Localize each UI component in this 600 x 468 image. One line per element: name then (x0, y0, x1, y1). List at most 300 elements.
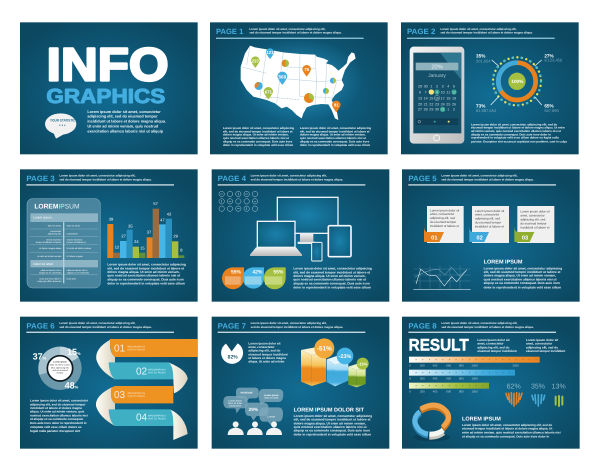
card 01: Lorem ipsum dolor sit (430, 209, 459, 212)
ribbon label 01: SITE TO TRUOY (127, 349, 145, 351)
stat: 27%: 9,123,456 (544, 58, 562, 63)
text block: Lorem ipsum dolor sit amet, consectetur (30, 399, 88, 402)
3D ring chart (413, 405, 450, 441)
text column right: elit, sed do eiusmod tempor incididunt ut labore et (300, 130, 370, 133)
text block: eiusmod tempor incididunt ut labore et dolore magna aliqua. Ut enim (471, 126, 565, 129)
text block: elit, sed do eiusmod tempor incididunt ut labore et (293, 271, 370, 274)
heading: page 5: PAGE 5 (408, 174, 437, 183)
card 03: adipiscing elit, sed (520, 218, 545, 221)
panel: page 8 result (402, 317, 580, 449)
text block: incididunt ut labore et dolore magna (30, 406, 82, 410)
intro text: sed do eiusmod tempor incididunt ut labore et dolore magna aliqua. (59, 178, 152, 181)
intro text: sed do eiusmod tempor incididunt ut labore et dolore magna aliqua. (59, 325, 152, 329)
speech bubbles (223, 388, 283, 425)
text column two: Lorem ipsum dolor sit (526, 338, 558, 342)
stat: 27%: 27% (544, 53, 554, 58)
laptop (250, 221, 302, 256)
phone with calendar: 15 (429, 96, 433, 100)
phone with calendar: 25 (446, 102, 450, 106)
bubble labels: Lorem ipsum (228, 399, 242, 402)
text block: aliquip ex ea commodo consequat. Duis aute irure (294, 429, 370, 433)
table panel: culpa qui officia deserunt (37, 280, 61, 283)
phone with calendar: January (428, 73, 446, 78)
pin: 671 (264, 87, 273, 99)
table panel: ut enim ad minim veniam (37, 255, 61, 258)
phone with calendar: 9 (436, 90, 438, 94)
text column one: adipiscing elit, sed do (477, 346, 509, 349)
badge: -23% (337, 348, 353, 364)
card 02: incididunt ut labore et (475, 225, 504, 228)
text block: elit, sed do eiusmod tempor incididunt ut labore et (294, 418, 371, 422)
phone with calendar: 19 (452, 96, 456, 100)
3D box: orange (301, 347, 326, 386)
phone with calendar: 17 (441, 96, 445, 100)
text column one: eiusmod tempor incididunt (477, 349, 517, 353)
text column right: quis nostrud exercitation ullamco laboris nisi ut (300, 136, 366, 140)
text block: eiusmod tempor incididunt (248, 353, 288, 356)
phone with calendar (410, 47, 464, 144)
bar chart: 29 (173, 234, 178, 238)
intro text: sed do eiusmod tempor incididunt ut labore et dolore magna aliqua. (251, 325, 343, 329)
phone with calendar: 30 (424, 85, 428, 89)
card 03: incididunt ut labore et (520, 226, 550, 229)
bubble labels: Lorem (268, 415, 275, 418)
phone with calendar: 29 (418, 85, 422, 89)
intro text: sed do eiusmod tempor incididunt ut labore et dolore magna aliqua. (249, 31, 342, 34)
heading: page 6: PAGE 6 (26, 321, 55, 330)
donut chart: 100% (511, 79, 523, 84)
phone with calendar: 7 (425, 90, 427, 94)
ribbon label 04: 04 (136, 412, 147, 423)
stat: 27% (544, 53, 562, 63)
stat: 13%: 13% (552, 382, 566, 390)
table panel: aliquip ex ea commodo (39, 272, 61, 274)
phone with calendar: 13 (418, 96, 422, 100)
stat: 35%: 35% (531, 382, 545, 390)
text block: Lorem ipsum dolor sit amet, consectetur adipiscing (293, 267, 372, 271)
stat: 65%: 65% (544, 103, 554, 108)
table panel: Lorem ipsum (33, 216, 52, 220)
text block: reprehenderit in voluptate velit esse cillum dolore eu fugiat nulla (471, 136, 559, 139)
badge: -23%: -23% (339, 354, 351, 359)
phone with calendar: 6 (419, 90, 421, 94)
table panel: ullamco laboris nisi ut (67, 269, 87, 272)
ring chart: dolor sit amet, consec (50, 364, 71, 366)
intro text: Lorem ipsum dolor sit amet, consectetur adipiscing elit, (59, 321, 135, 325)
intro text: sed do eiusmod tempor incididunt ut labore et dolore magna aliqua. (440, 31, 533, 34)
ribbon label 03: 03 (114, 389, 125, 400)
cover text block: exercitation ullamco laboris nisi ut aliquip (87, 129, 163, 133)
drop: orange 55% (222, 267, 244, 289)
pie: 82% (221, 343, 243, 364)
heading: lorem ipsum: LOREM IPSUM (462, 416, 501, 422)
bubble labels: dolor sit amet (228, 402, 242, 405)
stat: 15%: 15% (67, 347, 81, 357)
text block: adipiscing elit, sed do eiusmod tempor (30, 403, 86, 406)
phone with calendar: 29 (429, 108, 433, 112)
panel: page 6 ribbons (20, 317, 198, 449)
orange progress bar: 600 (446, 364, 451, 367)
table panel: adipiscing elit, (48, 233, 61, 235)
text column left: aliquip ex ea commodo consequat. Duis aute irure (223, 140, 292, 143)
text block: adipiscing elit, sed do (248, 349, 280, 352)
text block: dolore magna aliqua. Ut enim ad minim veniam, (107, 270, 180, 274)
badge: -51% (314, 338, 334, 358)
ring chart: tetur adipiscing elit, (51, 367, 69, 369)
intro text: sed do eiusmod tempor incididunt ut labore et dolore magna aliqua. (441, 178, 534, 181)
heading: page 3: PAGE 3 (26, 174, 55, 183)
table panel: dolor sit amet, (48, 225, 61, 227)
bubble labels: Lorem ipsum (264, 394, 279, 397)
green progress bar: 0 (409, 390, 411, 393)
text block: ut aliquip ex ea commodo consequat. (30, 417, 84, 421)
orange progress bar: 0 (409, 364, 411, 367)
ring chart: tempor (57, 372, 64, 374)
card 02: do eiusmod tempor (475, 221, 501, 224)
text block: voluptate velit esse cillum dolore eu (30, 425, 82, 429)
pin: 671: 671 (265, 89, 272, 94)
card 01: adipiscing elit, sed (430, 216, 455, 220)
phone with calendar: 3 (442, 85, 444, 89)
green progress bar: 400 (433, 390, 437, 393)
donut chart (491, 57, 542, 105)
text column right: aliquip ex ea commodo consequat. Duis aute irure (300, 140, 369, 143)
text block: Lorem ipsum dolor sit amet, consectetur adipiscing (107, 263, 186, 267)
text block: aliqua. Ut enim ad minim veniam, quis (30, 410, 84, 413)
table panel: dolor sit amet, (67, 225, 80, 227)
heading: result: RESULT (409, 335, 469, 354)
text block: quis nostrud exercitation ullamco laboris nisi ut (294, 425, 367, 429)
heading: page 4: PAGE 4 (218, 174, 246, 183)
intro text: Lorem ipsum dolor sit amet, consectetur adipiscing elit, (441, 174, 517, 177)
ribbon label 01: INFOGRAPHICS (127, 346, 145, 348)
phone with calendar: 27 (418, 108, 422, 112)
text block: ut aliquip ex ea commodo consequat. Duis aute irure dolor in (462, 435, 549, 438)
table panel: ullamco laboris nisi ut (41, 269, 61, 272)
panel: page 2 phone and donut (401, 22, 579, 154)
ribbon label 02: SITE TO TRUOY (148, 372, 166, 374)
speech bubble: your statistic: • • • (59, 123, 66, 128)
stat: 37%: 37% (33, 352, 46, 362)
bar chart: 27 (121, 234, 126, 238)
cover text block: Lorem ipsum dolor sit amet, consectetur (87, 110, 161, 114)
card 02: Lorem ipsum dolor sit (475, 209, 504, 213)
phone with calendar: 2 (436, 85, 438, 89)
phone (312, 242, 322, 261)
speech bubble: your statistic (45, 113, 76, 139)
panel: page 1 map (210, 22, 388, 154)
blue progress bar: 200 (420, 377, 425, 380)
bar chart: 57 (153, 201, 158, 206)
badge: -15% (357, 358, 369, 370)
pin: 121: 121 (266, 50, 274, 55)
text column right: dolore magna aliqua. Ut enim ad minim veniam, (300, 133, 365, 136)
stat: 35%: 35% (476, 53, 486, 58)
text block: ut labore et dolore magna (248, 356, 286, 360)
text block: elit, sed do eiusmod tempor incididunt ut labore et (107, 267, 184, 270)
stat: 73% (476, 103, 496, 113)
cover text block: incididunt ut labore et dolore magna aliqua. (87, 120, 166, 124)
text column two: adipiscing elit, sed do (526, 346, 558, 349)
phone with calendar: 22 (429, 102, 433, 106)
table panel: sed do eiusmod (67, 239, 82, 241)
card 02: amet, consectetur (475, 213, 499, 216)
bubble labels: consectetur (229, 405, 241, 407)
phone with calendar: 20 (418, 102, 422, 106)
pin: 91: 91 (334, 103, 339, 108)
phone with calendar: 4 (447, 85, 449, 89)
phone with calendar: 14 (424, 96, 428, 100)
bar chart: 37 (147, 230, 151, 234)
cover text block: adipiscing elit, sed do eiusmod tempor (87, 115, 158, 119)
text block: dolor in reprehenderit in voluptate velit esse cillum (293, 286, 371, 289)
intro text: Lorem ipsum dolor sit amet, consectetur adipiscing elit, (59, 174, 135, 177)
stat: 73%: 73% (476, 103, 486, 108)
text block: aliquip ex ea commodo consequat. Duis aute irure (107, 278, 184, 281)
title: GRAPHICS: GRAPHICS (46, 85, 165, 107)
text block: dolor in reprehenderit in voluptate velit esse cillum (484, 286, 561, 289)
orange progress bar: 200 (420, 364, 425, 367)
stat: 35% (476, 53, 491, 63)
heading: lorem ipsum: LOREM IPSUM (484, 259, 522, 265)
text column left: elit, sed do eiusmod tempor incididunt ut labore et (223, 130, 293, 133)
text block: dolor in reprehenderit in voluptate velit esse cillum (107, 282, 185, 285)
phone with calendar: 1 (447, 108, 449, 112)
text block: aliquip ex ea commodo consequat. Duis aute irure dolor in (471, 133, 551, 136)
intro text: Lorem ipsum dolor sit amet, consectetur adipiscing elit, (251, 174, 327, 177)
text block: Lorem ipsum dolor sit amet, consectetur adipiscing elit, sed do (471, 123, 557, 126)
stat: 73%: 81,987,654 (476, 108, 496, 113)
phone with calendar: 23 (435, 102, 439, 106)
tablet (328, 226, 351, 257)
heading: page 1: PAGE 1 (216, 27, 243, 36)
text block: ad minim veniam, quis nostrud exercitation ullamco laboris nisi ut (471, 129, 561, 133)
green progress bar: 1000 (471, 390, 478, 393)
card 01: amet, consectetur (430, 212, 454, 216)
bar chart: 12 (115, 245, 119, 250)
stat: 35% (531, 382, 545, 406)
line chart (413, 265, 471, 289)
card 03: do eiusmod tempor (520, 222, 547, 225)
ribbon label 02 (136, 366, 166, 377)
intro text: Lorem ipsum dolor sit amet, consectetur adipiscing elit, (440, 27, 516, 31)
text block: amet, consectetur (248, 345, 275, 349)
stat: 62%: 62% (507, 382, 521, 390)
table panel: Duis aute irure dolor in (40, 278, 61, 280)
card 01: 01 (431, 235, 437, 241)
stat: 35%: 201,654 (476, 59, 491, 63)
text block: aliquip ex ea commodo consequat. Duis aute irure (293, 282, 370, 285)
card 02: 02 (477, 235, 483, 241)
ribbon label 03: SITE TO TRUOY (127, 395, 145, 398)
heading: lorem ipsum dolor sit: LOREM IPSUM DOLOR SIT (294, 407, 364, 413)
text block: eiusmod tempor incididunt ut labore et dolore magna aliqua. Ut (462, 427, 552, 430)
text block: Duis aute irure dolor in reprehenderit in (30, 421, 87, 425)
text column two: amet, consectetur (526, 342, 552, 345)
3D box: blue (327, 356, 348, 386)
green progress bar: 200 (420, 390, 425, 393)
badge: -15%: -15% (358, 362, 367, 366)
phone with calendar: 28 (424, 108, 428, 112)
table panel: et dolore magna aliqua (39, 247, 61, 250)
text column left: dolor in reprehenderit in voluptate velit esse cillum (223, 143, 293, 147)
ribbon label 04: SITE TO TRUOY (148, 418, 166, 420)
blue progress bar: 0 (409, 377, 411, 380)
heading: page 8: PAGE 8 (408, 321, 437, 330)
text block: Lorem ipsum dolor sit amet, consectetur adipiscing (484, 267, 562, 270)
table panel: consectetur (50, 230, 62, 233)
phone with calendar: 5 (453, 85, 455, 89)
bubble labels: INCREASE (241, 392, 253, 394)
phone with calendar: 30 (435, 108, 439, 112)
text column right: dolor in reprehenderit in voluptate velit esse cillum (300, 143, 370, 147)
bubble labels: dolor sit amet (264, 397, 278, 399)
table panel: LOREMIPSUM (34, 203, 80, 210)
bar chart: 43 (167, 212, 171, 216)
ring chart: sed do eiusmod (52, 369, 68, 372)
text block: aliquip ex ea commodo consequat. Duis aute irure (484, 281, 560, 285)
ribbon label 02: INFOGRAPHICS (148, 369, 166, 371)
bar chart: 8 (180, 248, 183, 252)
orange progress bar: 800 (459, 364, 464, 367)
map: USA (241, 46, 356, 120)
stat: 48%: 48% (65, 381, 78, 391)
bar chart: 47 (160, 218, 165, 222)
panel: cover (20, 22, 198, 154)
table panel: tempor incididunt ut (67, 241, 86, 244)
title: INFO: INFO (47, 38, 169, 91)
text column one: amet, consectetur (477, 342, 504, 345)
blue progress bar (409, 370, 515, 380)
blue progress bar: 800 (459, 377, 464, 380)
text column left: Lorem ipsum dolor sit amet, consectetur adipiscing (223, 126, 294, 130)
orange progress bar: 1000 (471, 364, 478, 367)
panel: page 4 devices (212, 169, 389, 302)
card 03: amet, consectetur (520, 214, 545, 217)
table panel: Dolor sit amet (33, 262, 53, 266)
text block: aliqua. Ut enim ad minim (248, 360, 284, 363)
drop: green 55%: 55% (273, 269, 283, 275)
bubble labels (228, 392, 279, 418)
ribbon label 02: 02 (136, 366, 147, 377)
intro text: sed do eiusmod tempor incididunt ut labore et dolore magna aliqua. (251, 178, 343, 181)
people icons (228, 421, 282, 435)
speech bubble: your statistic: YOUR STATISTIC (50, 118, 75, 122)
card 03: 03 (522, 235, 528, 241)
table panel (27, 199, 100, 288)
panel: page 7 boxes and bubbles (212, 317, 389, 449)
drop: orange 55%: 55% (231, 269, 241, 275)
stat: 13% (552, 382, 566, 406)
phone with calendar: 18 (446, 96, 450, 100)
text block: dolor in reprehenderit in voluptate velit esse cillum (294, 433, 371, 437)
cover text block: Ut enim ad minim veniam, quis nostrud (87, 124, 158, 128)
text column right: Lorem ipsum dolor sit amet, consectetur adipiscing (300, 126, 371, 130)
bar chart: 39 (109, 217, 113, 222)
pin: 91 (332, 101, 341, 112)
card 01: do eiusmod tempor (430, 220, 456, 224)
blue progress bar: 600 (446, 377, 451, 380)
stat: 65%: 567,890 (544, 108, 559, 113)
card 03 (514, 206, 554, 243)
table panel: Duis aute (67, 278, 76, 280)
intro text: Lorem ipsum dolor sit amet, consectetur adipiscing elit, (249, 27, 325, 31)
text column one: Lorem ipsum dolor sit (477, 338, 509, 342)
pin: 237: 237 (252, 58, 259, 63)
bar chart: 24 (134, 239, 139, 244)
pin: 568 (277, 72, 287, 85)
card 03: Lorem ipsum dolor sit (520, 210, 550, 213)
pin: 121 (266, 48, 274, 59)
intro text: sed do eiusmod tempor incididunt ut labore et dolore magna aliqua. (441, 325, 534, 329)
table panel: Ut enim ad minim veniam (67, 247, 91, 250)
text column left: dolore magna aliqua. Ut enim ad minim veniam, (223, 133, 288, 136)
heading: page 7: PAGE 7 (218, 321, 246, 330)
phone with calendar: 26 (452, 102, 456, 106)
table panel: consectetur (67, 233, 78, 235)
card 02: adipiscing elit, sed (475, 217, 500, 220)
ribbon label 01 (114, 343, 145, 354)
ribbon label 04: INFOGRAPHICS (148, 415, 166, 417)
blue progress bar: 1000 (471, 377, 478, 380)
ribbon label 03: INFOGRAPHICS (127, 392, 145, 395)
orange progress bar: 2000 (512, 364, 519, 367)
table panel: tempor incididunt ut labore (36, 241, 61, 244)
text block: dolore magna aliqua. Ut enim ad minim veniam, (484, 274, 556, 278)
text block: quis nostrud exercitation ullamco laboris nisi ut (107, 274, 180, 278)
intro text: Lorem ipsum dolor sit amet, consectetur adipiscing elit, (251, 321, 327, 325)
green progress bar (409, 383, 489, 393)
table panel: sed do eiusmod (46, 239, 61, 241)
stat: 62% (506, 382, 522, 406)
text block: Lorem ipsum dolor sit amet, consectetur adipiscing (294, 414, 372, 418)
text block: quis nostrud exercitation ullamco laboris nisi ut (484, 278, 557, 281)
green progress bar: 600 (446, 390, 451, 393)
ribbon label 04 (136, 412, 166, 423)
text block: fugiat nulla pariatur. Excepteur sint (30, 429, 80, 433)
text block: Lorem ipsum dolor sit (248, 342, 280, 345)
card 02 (469, 206, 509, 243)
phone with calendar: 16 (435, 96, 439, 100)
card 01 (424, 206, 464, 243)
text block: enim ad minim veniam, quis nostrud exercitation ullamco laboris nisi (462, 431, 561, 434)
drop: green 55% (264, 267, 286, 289)
pin: 78: 78 (304, 67, 309, 72)
bar chart (107, 201, 184, 258)
pin: 237 (251, 56, 260, 68)
card 01: incididunt ut labore et (430, 224, 459, 228)
ribbon label 03 (114, 389, 145, 400)
heading: page 2: PAGE 2 (407, 27, 435, 36)
drop: blue 42% (243, 267, 264, 289)
text block: dolore magna aliqua. Ut enim ad minim veniam, (293, 274, 366, 278)
bubble labels: 29% (249, 407, 258, 412)
stat: 65% (544, 103, 559, 113)
monitor (277, 197, 338, 244)
ribbon graphic (96, 339, 198, 440)
text block: quis nostrud exercitation ullamco laboris nisi ut (293, 278, 366, 282)
phone with calendar: 24 (441, 102, 445, 106)
text block: pariatur. Excepteur sint occaecat cupidatat non proident, sunt in culpa (471, 140, 567, 143)
bar chart: 35 (128, 224, 133, 228)
pin: 78 (302, 65, 311, 77)
text block: Lorem ipsum dolor sit amet, consectetur adipiscing elit, sed do (462, 423, 552, 427)
pin: 568: 568 (278, 74, 286, 79)
text column two: eiusmod tempor incididunt (526, 349, 565, 353)
phone with calendar: 2 (453, 108, 455, 112)
bar chart: 15 (140, 246, 145, 250)
text block: nostrud exercitation ullamco laboris nisi (30, 414, 88, 417)
